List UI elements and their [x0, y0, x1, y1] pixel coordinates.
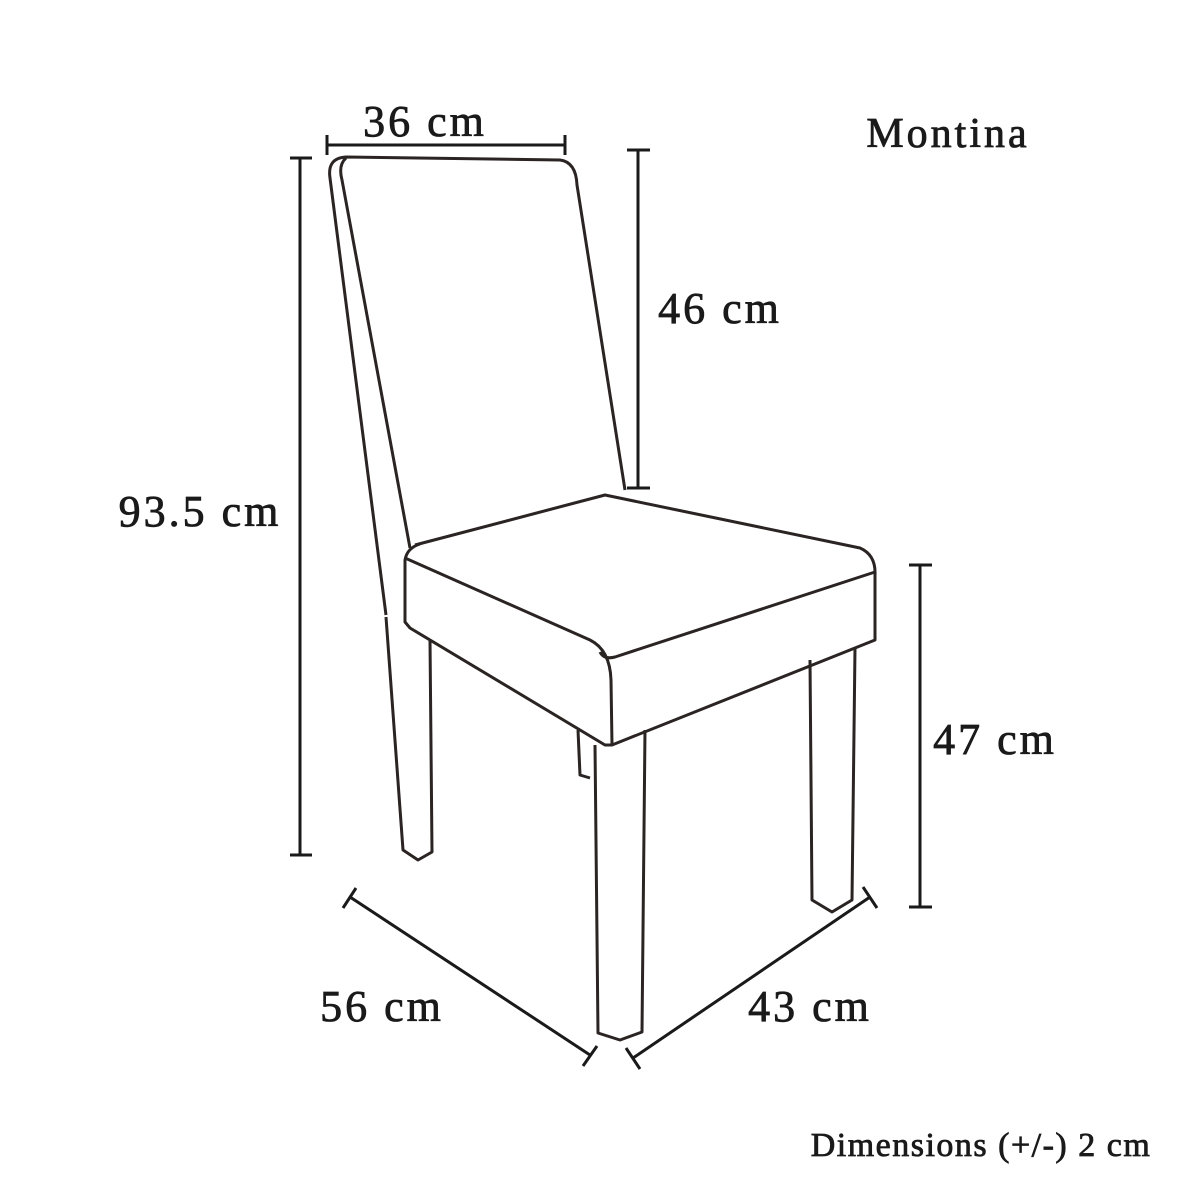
leg: hidden back stub [578, 730, 590, 778]
leg: right [810, 648, 855, 912]
dimension lines [290, 135, 932, 1069]
leg: front [595, 730, 645, 1040]
leg: back left [386, 617, 432, 860]
footnote: Dimensions (+/-) 2 cm [811, 1127, 1151, 1164]
label: 47 cm: 47 cm [933, 715, 1057, 764]
title: Montina [866, 111, 1030, 157]
label: 93.5 cm: 93.5 cm [119, 487, 281, 536]
chair back [330, 157, 625, 615]
label: 43 cm: 43 cm [748, 982, 872, 1031]
label: 36 cm: 36 cm [363, 97, 487, 146]
chair drawing [330, 157, 875, 1040]
label: 46 cm: 46 cm [658, 284, 782, 333]
label: 56 cm: 56 cm [320, 982, 444, 1031]
seat [405, 495, 875, 745]
